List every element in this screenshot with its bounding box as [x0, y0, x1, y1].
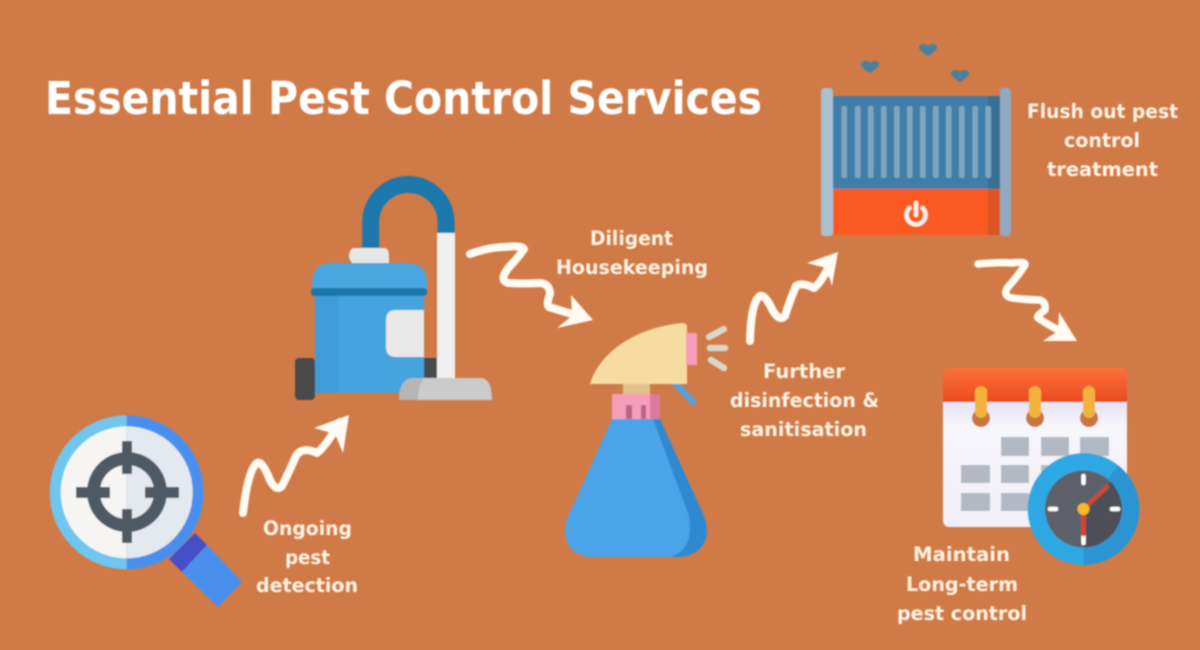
icon: clock	[1028, 453, 1140, 565]
icon: magnifying glass with target	[50, 415, 242, 607]
label: further disinfection and sanitisation	[730, 360, 879, 441]
label: ongoing pest detection: Ongoing	[263, 517, 352, 540]
label: flush out pest control treatment: control	[1064, 129, 1140, 152]
label: flush out pest control treatment: Flush out pest	[1027, 100, 1178, 123]
label: further disinfection and sanitisation: Further	[763, 360, 845, 383]
label: diligent housekeeping: Diligent	[590, 227, 673, 250]
label: maintain long-term pest control: Long-term	[906, 573, 1018, 596]
arrow: gate to calendar	[978, 262, 1077, 341]
arrow: spray to gate	[750, 252, 838, 341]
title: Essential Pest Control Services	[45, 72, 762, 125]
arrow: housekeeping to spray	[470, 246, 593, 328]
label: ongoing pest detection: detection	[256, 574, 358, 597]
label: flush out pest control treatment	[1027, 100, 1178, 181]
icons: flying insects	[861, 44, 969, 82]
label: ongoing pest detection	[256, 517, 358, 597]
label: maintain long-term pest control: Maintain	[913, 543, 1010, 566]
icon: calendar	[943, 368, 1127, 527]
label: flush out pest control treatment: treatment	[1047, 158, 1158, 181]
label: diligent housekeeping	[556, 227, 708, 279]
label: diligent housekeeping: Housekeeping	[556, 256, 708, 279]
label: further disinfection and sanitisation: sanitisation	[740, 418, 867, 441]
label: maintain long-term pest control: pest control	[897, 602, 1027, 625]
arrow: detection to housekeeping	[243, 415, 349, 513]
icon: spray bottle	[565, 323, 725, 557]
icon: electric fly killer	[821, 88, 1011, 236]
label: maintain long-term pest control	[897, 543, 1027, 625]
icon: vacuum cleaner	[295, 184, 492, 400]
label: ongoing pest detection: pest	[285, 546, 330, 569]
label: further disinfection and sanitisation: disinfection &	[730, 389, 879, 412]
